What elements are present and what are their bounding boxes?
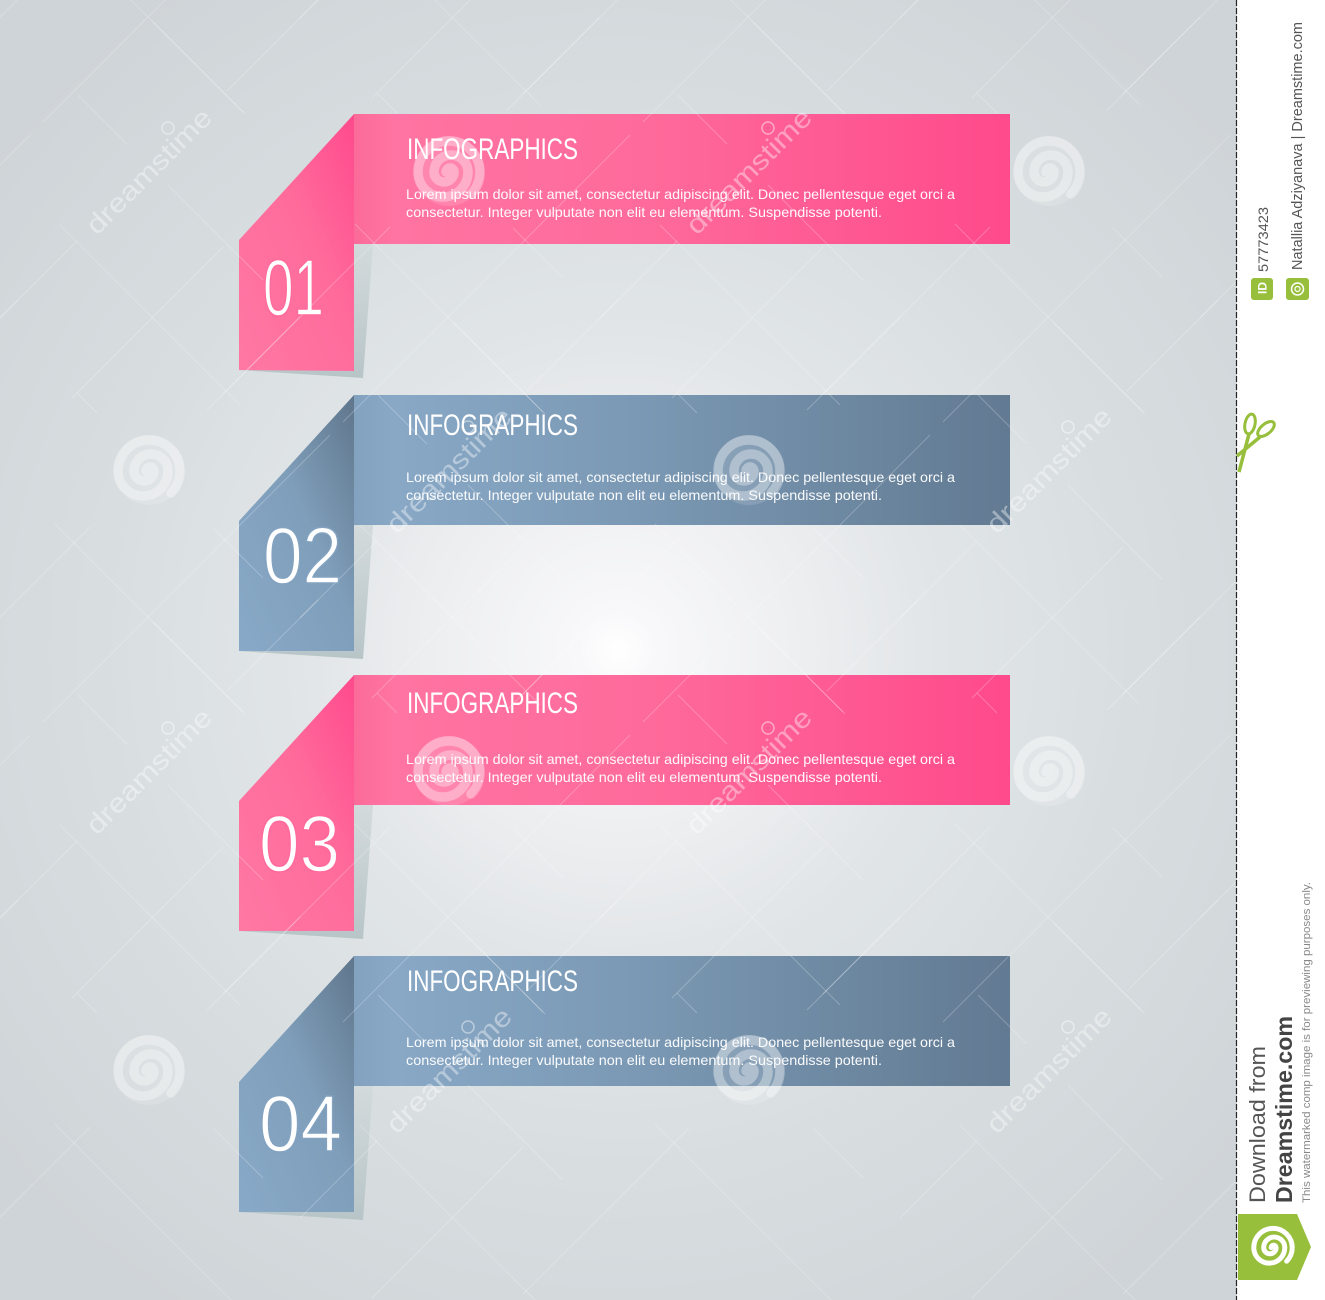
id badge bbox=[1251, 278, 1273, 300]
preview disclaimer: This watermarked comp image is for previewing purposes only. bbox=[1301, 882, 1313, 1203]
copyright badge bbox=[1286, 278, 1309, 300]
watermark wordmarks: dreamstime bbox=[680, 102, 818, 240]
watermark wordmarks: dreamstime bbox=[980, 1001, 1118, 1139]
fold shadow 03 bbox=[239, 805, 373, 939]
body text 04: Lorem ipsum dolor sit amet, consectetur adipiscing elit. Donec pellentesque eget orci a bbox=[406, 1034, 955, 1050]
ribbon fold 01 bbox=[239, 114, 354, 371]
watermark wordmarks: dreamstime bbox=[380, 401, 518, 539]
panel: step 03 bbox=[239, 675, 1010, 939]
heading 03: INFOGRAPHICS bbox=[407, 687, 578, 720]
body text 03 bbox=[406, 751, 955, 785]
fold shadow 02 bbox=[239, 525, 373, 659]
ribbon fold 02 bbox=[239, 395, 354, 651]
fold shadow 01 bbox=[239, 244, 373, 378]
ribbon fold 03 bbox=[239, 675, 354, 931]
body text 01: Lorem ipsum dolor sit amet, consectetur adipiscing elit. Donec pellentesque eget orci a bbox=[406, 186, 955, 202]
body text 04: consectetur. Integer vulputate non elit eu elementum. Suspendisse potenti. bbox=[406, 1052, 882, 1068]
watermark wordmarks bbox=[80, 102, 1118, 1139]
icon: scissors bbox=[1237, 413, 1277, 472]
body text 02: Lorem ipsum dolor sit amet, consectetur adipiscing elit. Donec pellentesque eget orci a bbox=[406, 469, 955, 485]
author credit: Natallia Adziyanava | Dreamstime.com bbox=[1290, 22, 1306, 270]
panel: step 02 bbox=[239, 395, 1010, 659]
body text 04 bbox=[406, 1034, 955, 1068]
fold shadow 04 bbox=[239, 1086, 373, 1220]
body text 01 bbox=[406, 186, 955, 220]
number 03: 03 bbox=[259, 799, 340, 888]
dreamstime brand: Dreamstime.com bbox=[1271, 1016, 1297, 1203]
watermark spirals bbox=[114, 136, 1084, 1105]
id badge: ID bbox=[1256, 282, 1270, 294]
logo tag bbox=[1238, 1214, 1311, 1280]
heading 02: INFOGRAPHICS bbox=[407, 409, 578, 442]
ribbon band 01 bbox=[354, 114, 1010, 244]
image id: 57773423 bbox=[1255, 207, 1271, 272]
heading 01: INFOGRAPHICS bbox=[407, 133, 578, 166]
ribbon band 02 bbox=[354, 395, 1010, 525]
panel: step 01 bbox=[239, 114, 1010, 378]
body text 02: consectetur. Integer vulputate non elit eu elementum. Suspendisse potenti. bbox=[406, 487, 882, 503]
body text 02 bbox=[406, 469, 955, 503]
body text 01: consectetur. Integer vulputate non elit eu elementum. Suspendisse potenti. bbox=[406, 204, 882, 220]
download from: Download from bbox=[1245, 1046, 1270, 1203]
body text 03: Lorem ipsum dolor sit amet, consectetur adipiscing elit. Donec pellentesque eget orci a bbox=[406, 751, 955, 767]
panel: step 04 bbox=[239, 956, 1010, 1220]
sidebar: download strip bbox=[1236, 0, 1325, 1300]
watermark wordmarks: dreamstime bbox=[980, 401, 1118, 539]
number 04: 04 bbox=[259, 1079, 342, 1168]
watermark wordmarks: dreamstime bbox=[380, 1001, 518, 1139]
ribbon band 03 bbox=[354, 675, 1010, 805]
number 01: 01 bbox=[263, 243, 324, 332]
number 02: 02 bbox=[263, 511, 342, 600]
ribbon band 04 bbox=[354, 956, 1010, 1086]
heading 04: INFOGRAPHICS bbox=[407, 965, 578, 998]
ribbon fold 04 bbox=[239, 956, 354, 1212]
watermark wordmarks: dreamstime bbox=[80, 702, 218, 840]
body text 03: consectetur. Integer vulputate non elit eu elementum. Suspendisse potenti. bbox=[406, 769, 882, 785]
watermark wordmarks: dreamstime bbox=[680, 702, 818, 840]
watermark wordmarks: dreamstime bbox=[80, 102, 218, 240]
